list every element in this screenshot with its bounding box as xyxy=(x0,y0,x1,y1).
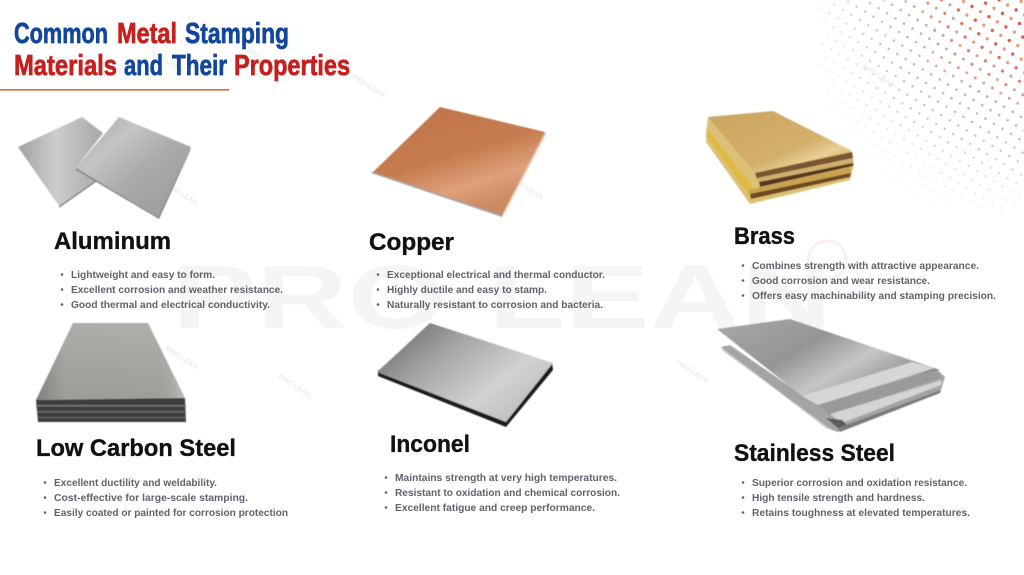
panel: low carbon steel xyxy=(36,323,288,519)
title xyxy=(14,18,350,82)
bullet list: Superior corrosion and oxidation resistance. xyxy=(752,477,967,489)
bullet list: Retains toughness at elevated temperatures. xyxy=(752,507,970,519)
icon: steel plate stack xyxy=(36,323,186,422)
large watermark: PRO-LEAN xyxy=(172,248,832,348)
heading: Low Carbon Steel xyxy=(36,435,236,462)
small watermarks: PRO-LEAN xyxy=(351,74,386,99)
small watermarks: PRO-LEAN xyxy=(164,182,199,207)
bullet list xyxy=(385,472,620,514)
icon: stainless sheets xyxy=(717,319,945,432)
bullet list: Excellent fatigue and creep performance. xyxy=(395,502,595,514)
small watermarks: PRO-LEAN xyxy=(675,360,710,385)
panel: copper xyxy=(369,107,605,311)
bullet list: Naturally resistant to corrosion and bacteria. xyxy=(387,299,603,311)
title: Stamping xyxy=(185,18,289,50)
bullet list: Excellent ductility and weldability. xyxy=(54,477,217,489)
icon: inconel sheet xyxy=(377,323,553,427)
panel: aluminum xyxy=(18,117,283,311)
small watermarks: PRO-LEAN xyxy=(277,374,312,399)
bullet list: Excellent corrosion and weather resistance. xyxy=(71,284,283,296)
halftone dot pattern xyxy=(820,0,1024,210)
title: Properties xyxy=(234,50,350,82)
title underline xyxy=(0,89,229,91)
bullet list xyxy=(61,269,283,311)
small watermarks: PRO-LEAN xyxy=(149,49,184,74)
small watermarks: PRO-LEAN xyxy=(509,176,544,201)
small watermarks: PRO-LEAN xyxy=(245,48,280,73)
panel: inconel xyxy=(377,323,620,514)
bullet list: Resistant to oxidation and chemical corrosion. xyxy=(395,487,620,499)
icon: aluminum sheets xyxy=(18,117,191,219)
panel: stainless steel xyxy=(717,319,970,519)
title: Common xyxy=(14,18,108,50)
bullet list: Combines strength with attractive appearance. xyxy=(752,260,979,272)
icon: copper sheet xyxy=(371,107,546,217)
title: Materials xyxy=(14,50,117,82)
bullet list: Good corrosion and wear resistance. xyxy=(752,275,930,287)
bullet list xyxy=(742,477,970,519)
bullet list: Lightweight and easy to form. xyxy=(71,269,215,281)
title: Metal xyxy=(117,18,177,50)
heading: Aluminum xyxy=(54,228,171,255)
small watermarks: PRO-LEAN xyxy=(861,64,896,89)
heading: Inconel xyxy=(390,431,470,458)
bullet list xyxy=(44,477,288,519)
bullet list: Easily coated or painted for corrosion protection xyxy=(54,507,288,519)
bullet list: Highly ductile and easy to stamp. xyxy=(387,284,547,296)
bullet list: High tensile strength and hardness. xyxy=(752,492,925,504)
small watermarks: PRO-LEAN xyxy=(164,346,199,371)
large watermark xyxy=(172,241,846,348)
title: Their xyxy=(172,50,227,82)
bullet list xyxy=(742,260,996,302)
bullet list: Cost-effective for large-scale stamping. xyxy=(54,492,248,504)
heading: Copper xyxy=(369,229,454,256)
bullet list: Good thermal and electrical conductivity. xyxy=(71,299,270,311)
heading: Brass xyxy=(734,223,795,250)
bullet list: Exceptional electrical and thermal conductor. xyxy=(387,269,605,281)
panel: brass xyxy=(706,111,996,302)
bullet list: Maintains strength at very high temperatures. xyxy=(395,472,617,484)
small watermarks xyxy=(149,48,896,399)
bullet list: Offers easy machinability and stamping precision. xyxy=(752,290,996,302)
title: and xyxy=(124,50,163,82)
heading: Stainless Steel xyxy=(734,440,895,467)
bullet list xyxy=(377,269,605,311)
icon: brass stack xyxy=(706,111,854,204)
